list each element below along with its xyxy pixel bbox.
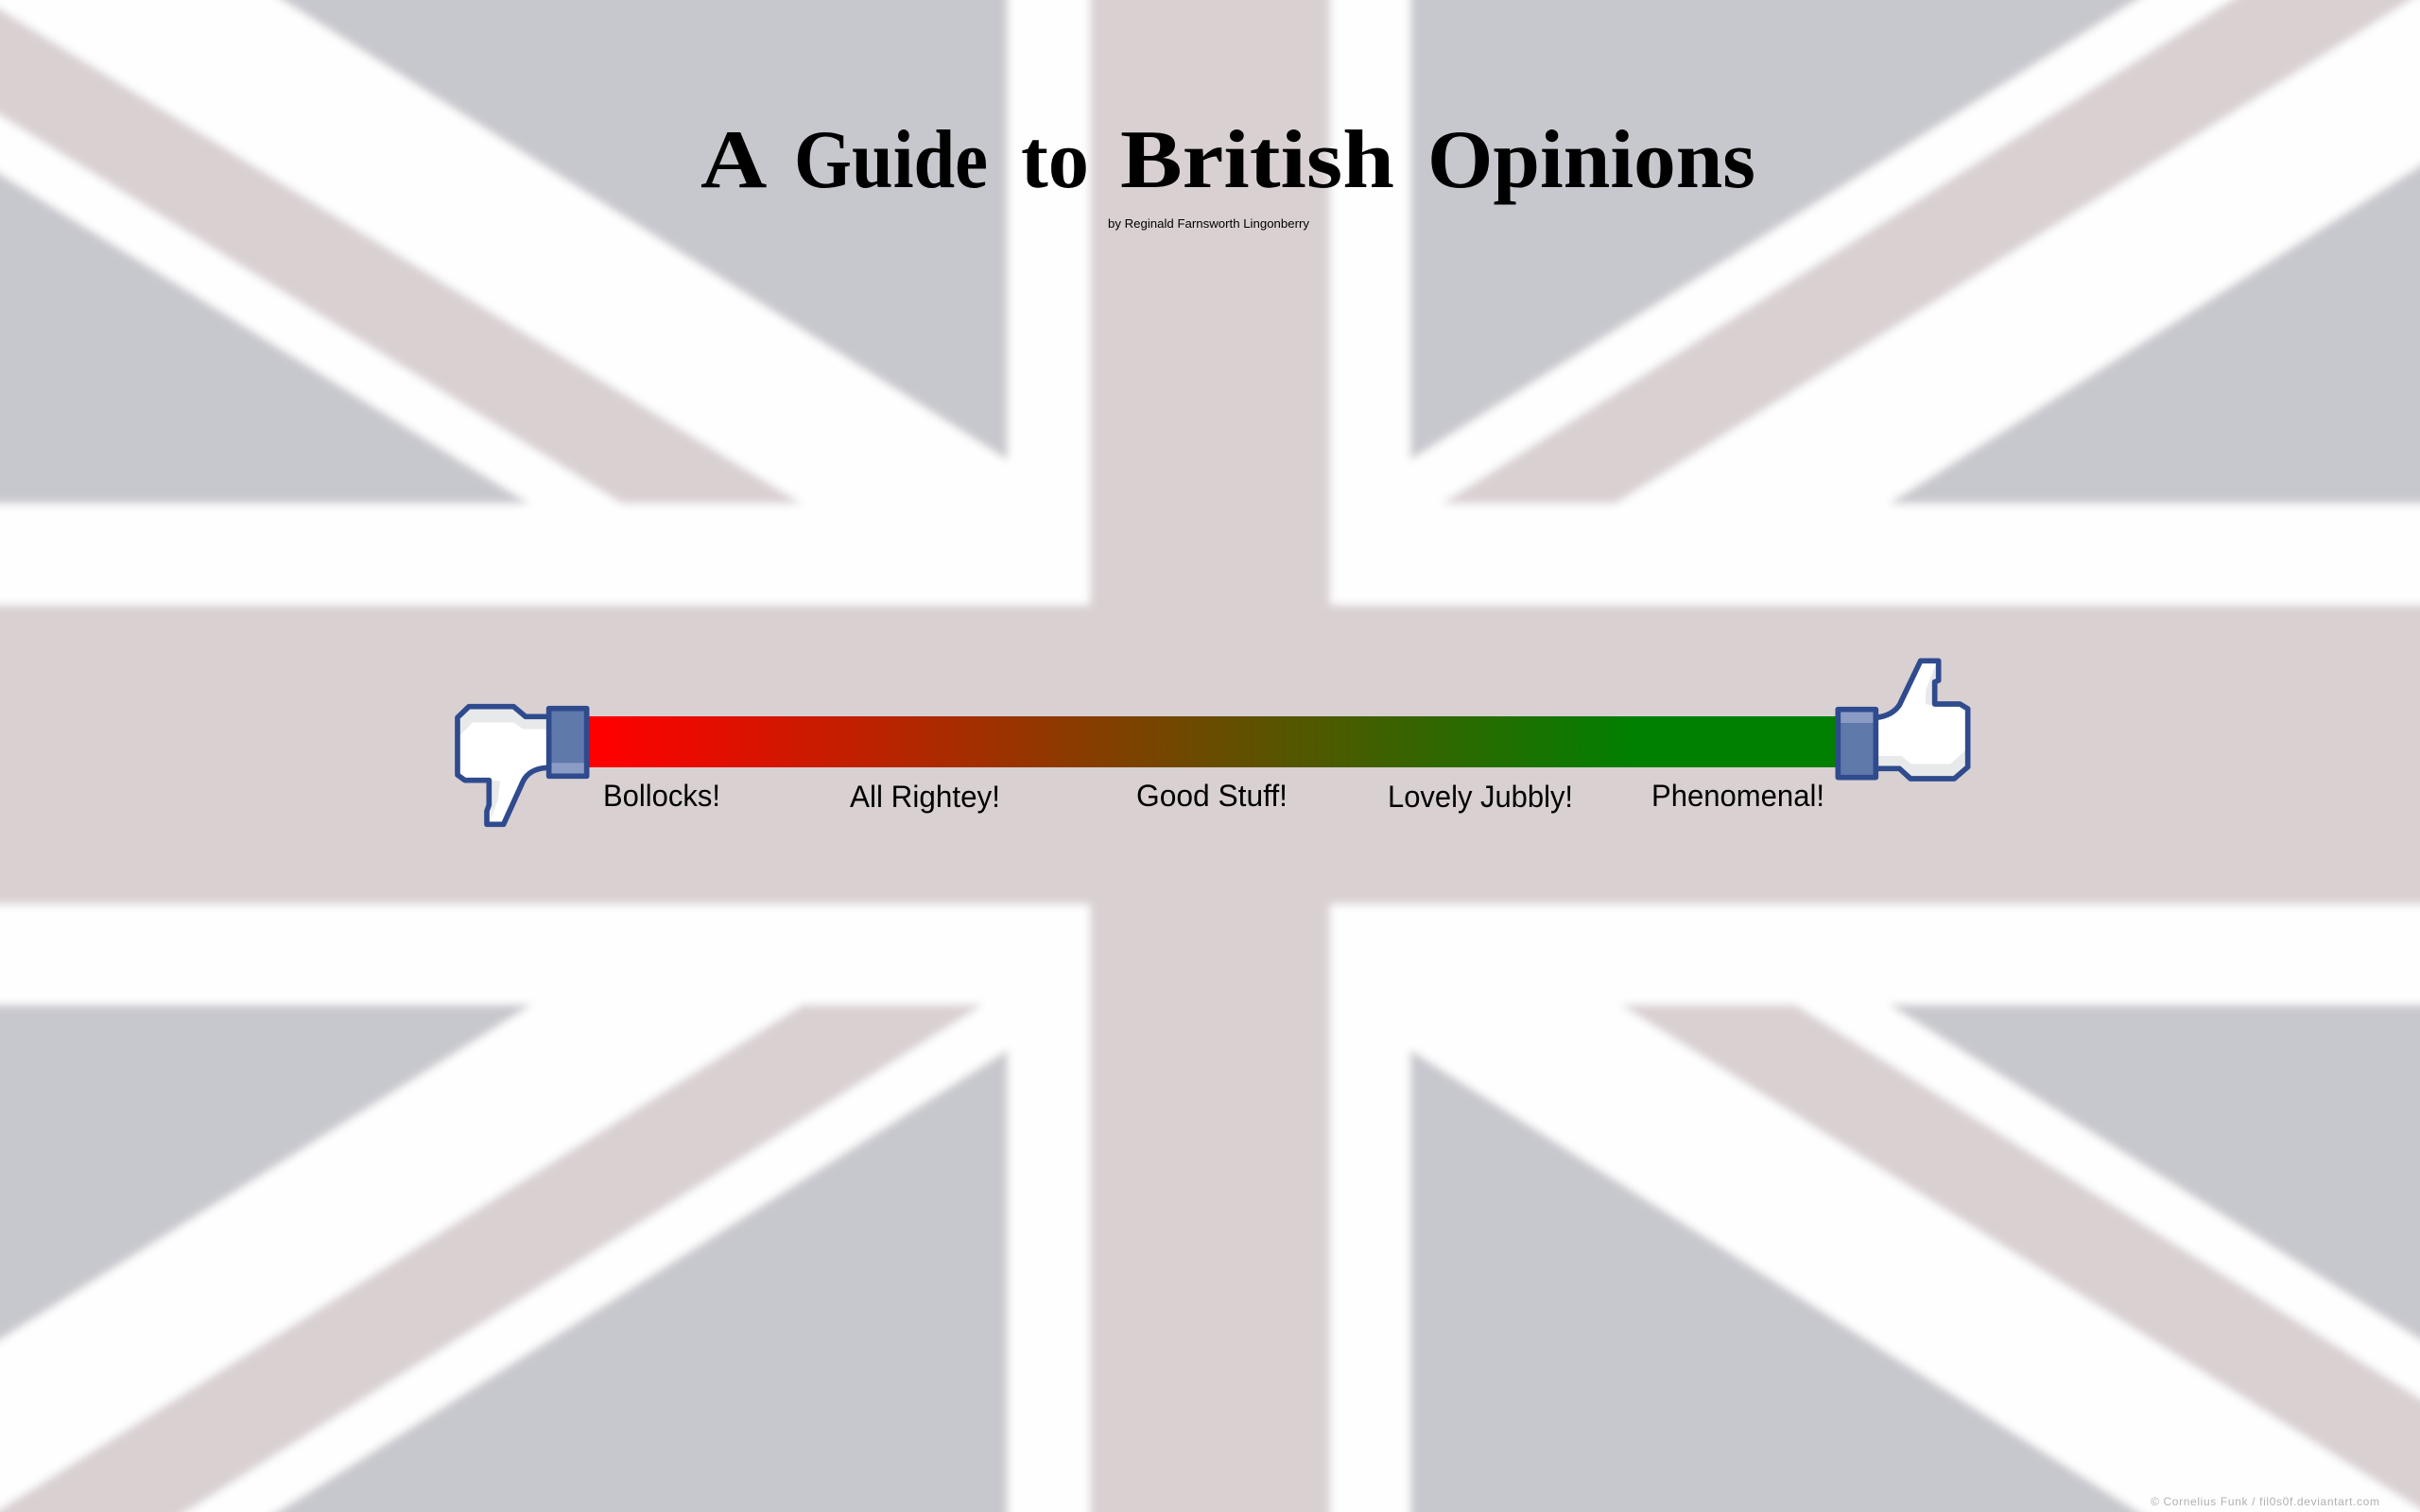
- title: to: [1021, 114, 1089, 206]
- byline: by Reginald Farnsworth Lingonberry: [1108, 216, 1310, 231]
- title: Guide: [794, 114, 988, 206]
- icon: thumbs down: [458, 707, 587, 824]
- title: Opinions: [1427, 114, 1755, 206]
- title: A: [700, 114, 767, 206]
- label: All Rightey!: All Rightey!: [850, 780, 1000, 814]
- label: Phenomenal!: Phenomenal!: [1651, 779, 1824, 813]
- opinion scale bar: [588, 716, 1836, 767]
- label: Bollocks!: Bollocks!: [603, 779, 720, 813]
- credit: © Cornelius Funk / fil0s0f.deviantart.com: [2151, 1495, 2379, 1508]
- label: Lovely Jubbly!: Lovely Jubbly!: [1388, 780, 1573, 814]
- icon: thumbs up: [1838, 661, 1968, 779]
- title: British: [1120, 114, 1394, 206]
- label: Good Stuff!: Good Stuff!: [1136, 779, 1288, 813]
